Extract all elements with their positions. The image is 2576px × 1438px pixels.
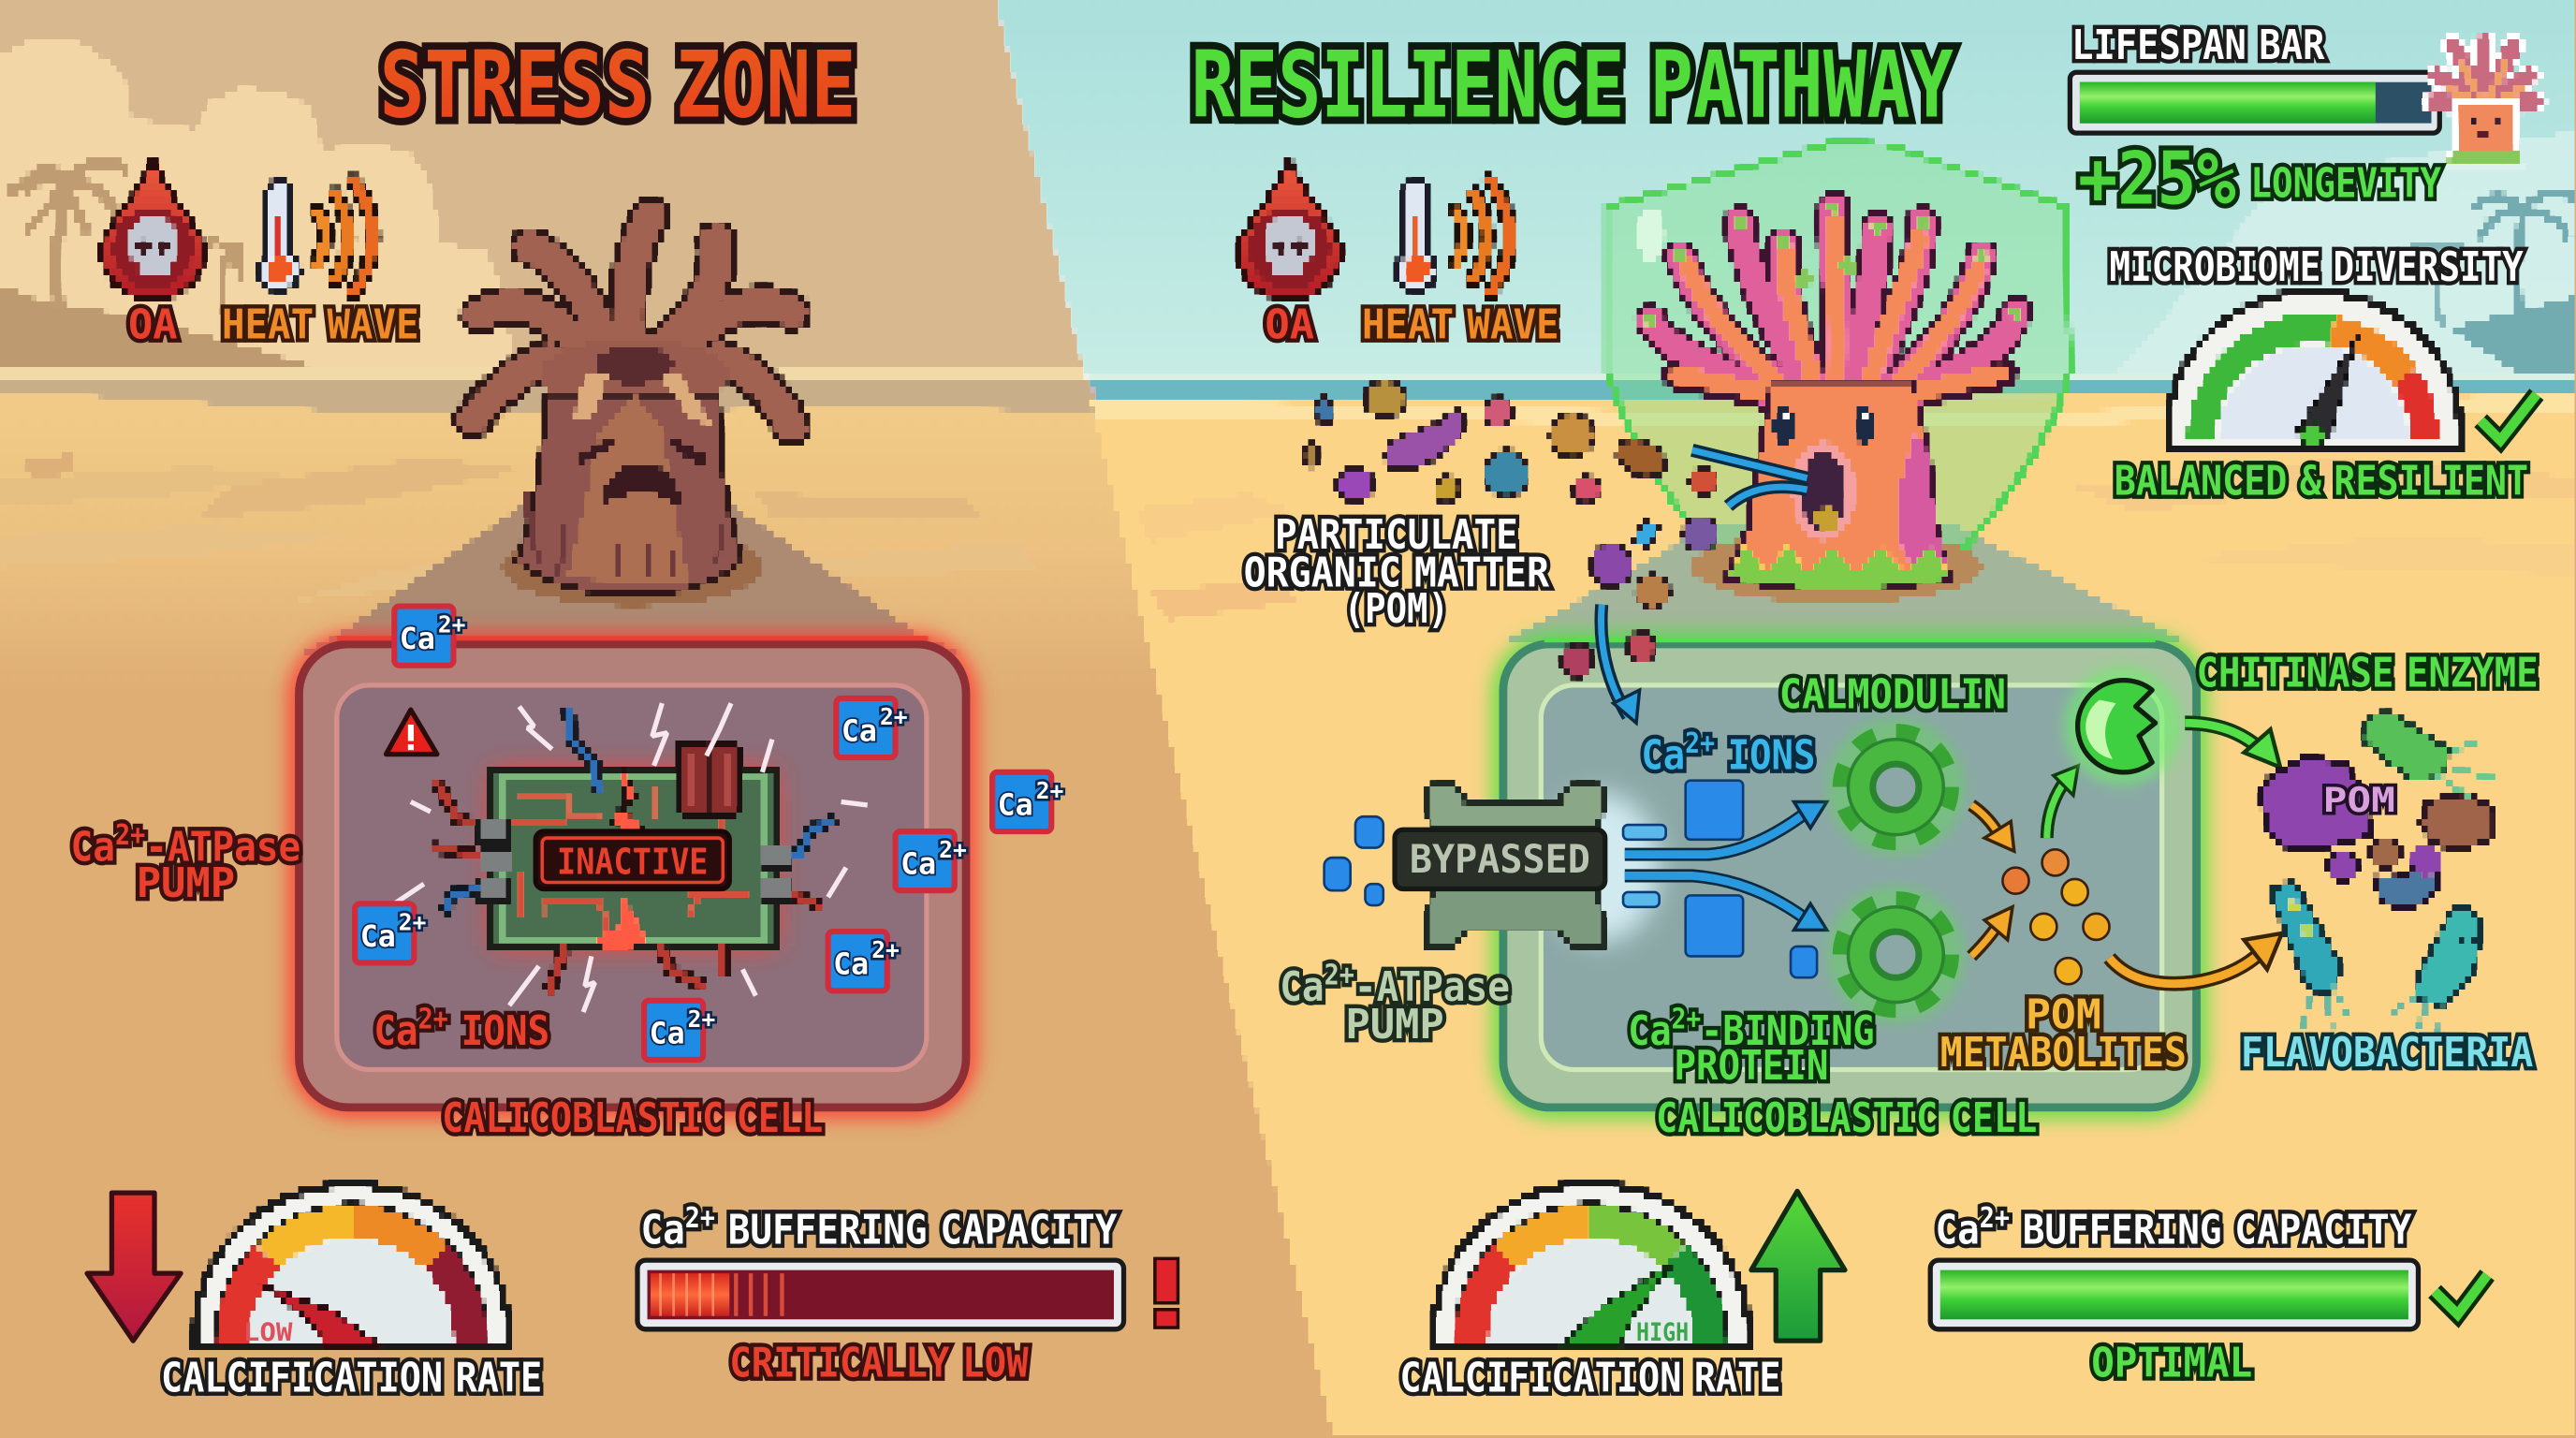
widget: lifespan xyxy=(2070,22,2535,222)
gauge: high calcification rate xyxy=(1434,1184,1748,1347)
label: Ca2+-ATPase pump: 2+ xyxy=(1325,959,1354,991)
bar: lifespan xyxy=(2070,72,2439,133)
label: heat wave: HEAT WAVE xyxy=(222,301,419,349)
label: Ca2+ ions: 2+ xyxy=(1685,727,1715,760)
label: calicoblastic cell: CALICOBLASTIC CELL xyxy=(1656,1094,2037,1142)
ions: blue squares xyxy=(1325,781,1817,977)
ion: Ca2+ tag 7 xyxy=(355,903,426,962)
label: Ca2+-ATPase pump: PUMP xyxy=(137,859,235,907)
metabolites: gold dots xyxy=(2002,849,2110,984)
label: inactive xyxy=(535,831,729,888)
ion: Ca2+ tag 4 xyxy=(896,831,967,890)
ion: Ca2+ tag 2: 2+ xyxy=(880,703,908,730)
panel: calicoblastic cell (stress) xyxy=(299,636,966,1142)
icon: check xyxy=(2435,1275,2487,1314)
arrow: calcification up xyxy=(1751,1191,1845,1341)
label: HIGH: HIGH xyxy=(1636,1319,1689,1347)
icon: mini coral xyxy=(2435,43,2535,165)
ion: Ca2+ tag 1 xyxy=(394,607,465,666)
label: Ca2+ binding protein: Ca xyxy=(1628,1007,1677,1055)
funnel: zoom beam from coral to cell xyxy=(296,500,970,657)
ion: Ca2+ tag 2: Ca xyxy=(842,715,877,749)
icon: thermometer and heat waves xyxy=(259,181,373,292)
bar: buffering optimal xyxy=(1930,1260,2418,1329)
label: flavobacteria: FLAVOBACTERIA xyxy=(2241,1029,2533,1077)
panel: stress zone xyxy=(71,33,1178,1402)
ion: Ca2+ tag 2 xyxy=(836,698,908,757)
icon: chitinase enzyme xyxy=(2063,668,2182,785)
ion: Ca2+ tag 5: Ca xyxy=(833,948,869,982)
ion: Ca2+ tag 1: Ca xyxy=(400,623,435,656)
funnel: zoom beam from coral to cell xyxy=(1503,526,2188,644)
label: optimal: OPTIMAL xyxy=(2091,1340,2252,1387)
POM chunks and bacteria xyxy=(2261,712,2494,1038)
gauge: low calcification rate xyxy=(196,1184,507,1347)
label: Ca2+-ATPase pump: PUMP xyxy=(1345,1001,1444,1049)
ion: Ca2+ tag 3: 2+ xyxy=(1036,777,1063,804)
ion: Ca2+ tag 6: Ca xyxy=(650,1017,685,1050)
ion: Ca2+ tag 6 xyxy=(644,1001,715,1060)
label: Ca2+-ATPase pump: -ATPase xyxy=(1354,963,1510,1011)
pump halves xyxy=(1426,784,1605,948)
stat: +25% longevity xyxy=(2078,138,2442,222)
arrows: POM ingestion into mouth xyxy=(1692,450,1808,506)
label: buffering capacity: BUFFERING CAPACITY xyxy=(2010,1207,2412,1255)
ion: Ca2+ tag 5 xyxy=(828,932,900,990)
label: heat wave: HEAT WAVE xyxy=(1362,301,1559,349)
ion: Ca2+ tag 5: 2+ xyxy=(871,936,900,963)
bar: buffering critically low xyxy=(637,1260,1123,1329)
gauge dial xyxy=(1434,1184,1748,1347)
title: stress zone: STRESS ZONE xyxy=(379,33,856,139)
arrows: metabolites flow xyxy=(1971,766,2078,956)
icon: check xyxy=(2481,394,2537,440)
label: critically low: CRITICALLY LOW xyxy=(729,1340,1029,1387)
label: lifespan bar: LIFESPAN BAR xyxy=(2071,22,2325,69)
label: particulate organic matter xyxy=(1244,511,1550,633)
shield: protective dome xyxy=(1606,141,2070,552)
label: Ca2+-ATPase pump: Ca xyxy=(1280,963,1329,1011)
stat: +25% longevity: +25% xyxy=(2078,138,2236,222)
label: Ca2+-ATPase pump: -ATPase xyxy=(145,824,300,872)
arrow: enzyme to POM xyxy=(2185,723,2280,768)
arrows: calcium flow xyxy=(1625,801,1827,930)
label: Ca2+ ions: Ca xyxy=(373,1007,423,1055)
particles: entering the cell xyxy=(1562,633,1654,677)
label: LOW: LOW xyxy=(243,1319,293,1347)
label: Ca2+-ATPase pump: 2+ xyxy=(115,819,145,852)
label: POM metabolites xyxy=(1940,991,2187,1077)
title: resilience pathway: RESILIENCE PATHWAY xyxy=(1191,33,1954,139)
bacterium: teal rod xyxy=(2271,881,2349,1032)
label: calcification rate: CALCIFICATION RATE xyxy=(161,1355,542,1402)
label: bypassed: BYPASSED xyxy=(1410,836,1590,882)
label: OA: OA xyxy=(128,301,178,349)
icon: exclamation xyxy=(1155,1258,1178,1328)
label: calcification rate: CALCIFICATION RATE xyxy=(1399,1355,1781,1402)
label: inactive: INACTIVE xyxy=(557,842,708,884)
label: POM metabolites: METABOLITES xyxy=(1940,1029,2187,1077)
arrow: metabolites to flavobacteria xyxy=(2110,933,2282,984)
label: Ca2+ ions: Ca xyxy=(1641,731,1690,779)
label: Ca2+ ions: IONS xyxy=(1715,731,1815,779)
background: resilience beach xyxy=(996,0,2576,1438)
bacterium: green xyxy=(2363,712,2494,799)
label: calicoblastic cell: CALICOBLASTIC CELL xyxy=(442,1094,823,1142)
ion: Ca2+ tag 4: Ca xyxy=(900,848,936,882)
illustration: stressed coral xyxy=(474,217,792,607)
label: particulate organic matter: PARTICULATE xyxy=(1275,511,1518,559)
background: stress zone beach xyxy=(0,0,1364,1438)
chip body xyxy=(433,710,835,992)
panel: resilience pathway xyxy=(1191,22,2539,1402)
chunks: brown and small POM xyxy=(2328,794,2494,907)
label: buffering capacity: BUFFERING CAPACITY xyxy=(715,1207,1118,1255)
label: Ca2+-ATPase pump: Ca xyxy=(71,824,120,872)
ion: Ca2+ tag 7: 2+ xyxy=(399,908,426,935)
label: particulate organic matter: ORGANIC MATTER xyxy=(1244,550,1550,597)
label: particulate organic matter: (POM) xyxy=(1344,585,1449,633)
ion: Ca2+ tag 3: Ca xyxy=(998,788,1033,822)
arrow: calcification down xyxy=(87,1193,181,1341)
label: Ca2+ binding protein: 2+ xyxy=(1672,1004,1701,1036)
bacterium: teal face xyxy=(2392,907,2481,1038)
illustration: healthy coral xyxy=(1645,200,2022,603)
widget: microbiome diversity xyxy=(2110,243,2537,505)
ion: Ca2+ tag 6: 2+ xyxy=(688,1005,715,1033)
gauge: microbiome xyxy=(2169,292,2459,448)
label: Ca2+ ions: IONS xyxy=(448,1007,549,1055)
label: buffering capacity: Ca xyxy=(641,1207,690,1255)
icon: gear binding protein xyxy=(1827,886,1965,1023)
label: Ca2+ ions: 2+ xyxy=(418,1004,448,1036)
stat: +25% longevity: LONGEVITY xyxy=(2250,160,2442,208)
label: Ca2+ binding protein: -BINDING xyxy=(1701,1007,1875,1055)
label: buffering capacity: 2+ xyxy=(1980,1202,2010,1235)
label: buffering capacity: Ca xyxy=(1935,1207,1984,1255)
panel: calicoblastic cell (resilient) xyxy=(1325,605,2197,1142)
label: balanced & resilient: BALANCED & RESILIENT xyxy=(2115,457,2528,505)
ion: Ca2+ tag 3 xyxy=(992,772,1063,831)
sparks xyxy=(394,703,868,1012)
ion: Ca2+ tag 4: 2+ xyxy=(939,836,967,863)
label: chitinase enzyme: CHITINASE ENZYME xyxy=(2197,650,2539,697)
chunk: POM purple xyxy=(2261,756,2395,851)
icon: ocean acidification drop xyxy=(102,159,204,299)
icon: gear calmodulin xyxy=(1827,718,1965,856)
icon: thermometer and heat waves xyxy=(1397,181,1510,292)
label: calmodulin: CALMODULIN xyxy=(1779,670,2006,718)
label: Ca2+ binding protein xyxy=(1628,1004,1875,1090)
label: OA: OA xyxy=(1265,301,1314,349)
component: bypassed pump xyxy=(1395,784,1660,948)
label: POM metabolites: POM xyxy=(2026,991,2101,1039)
label: Ca2+-ATPase pump xyxy=(71,819,300,907)
arrow: particle influx xyxy=(1601,605,1640,723)
label: Ca2+-ATPase pump xyxy=(1280,959,1510,1049)
particles: particulate organic matter xyxy=(1305,381,1717,608)
gauge dial xyxy=(196,1184,507,1347)
label: Ca2+ binding protein: PROTEIN xyxy=(1674,1042,1828,1090)
icon: ocean acidification drop xyxy=(1238,159,1340,299)
component: inactive pump chip xyxy=(433,710,835,992)
chunk: POM purple: POM xyxy=(2323,780,2395,820)
ion: Ca2+ tag 7: Ca xyxy=(360,920,396,954)
label: buffering capacity: 2+ xyxy=(685,1202,715,1235)
ion: Ca2+ tag 1: 2+ xyxy=(438,611,465,638)
icon: warning triangle xyxy=(386,710,437,755)
